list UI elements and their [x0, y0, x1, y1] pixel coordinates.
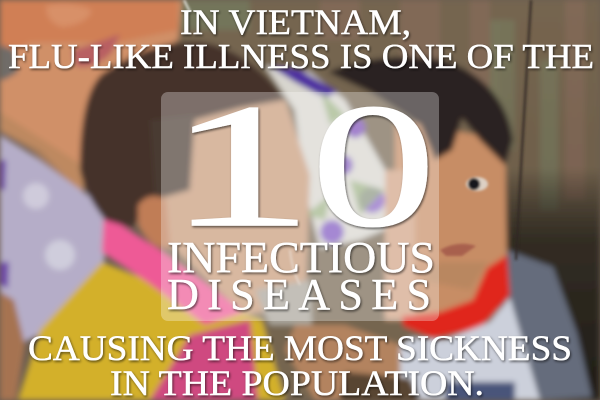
big number 10: 0 [311, 68, 436, 264]
big number 10: 1 [167, 68, 314, 264]
heading: top lines: IN VIETNAM, [180, 2, 411, 42]
heading: bottom lines [28, 328, 572, 400]
mother skin [0, 0, 182, 195]
baby face [135, 100, 310, 315]
shirt print [445, 382, 515, 400]
wood wall [150, 0, 600, 400]
label: infectious diseases: INFECTIOUS [167, 233, 435, 282]
heading: top lines: FLU-LIKE ILLNESS IS ONE OF THE [8, 37, 594, 76]
heading: top lines [8, 2, 594, 76]
label: infectious diseases: DISEASES [167, 270, 431, 319]
patterned hood [265, 66, 395, 248]
baby hair [80, 42, 285, 228]
boy neck [420, 262, 488, 290]
boy shirt white [345, 297, 540, 400]
boy eye [440, 177, 488, 256]
pink collar [102, 214, 245, 325]
big number 10 [167, 68, 436, 264]
mother blouse [0, 135, 105, 345]
mother lips [72, 34, 120, 67]
boy hair [328, 57, 513, 165]
red collar [402, 255, 510, 338]
boy face [395, 120, 507, 322]
boy sleeve grey [507, 250, 592, 400]
baby hand [285, 325, 400, 400]
pink scarf [150, 320, 258, 400]
mother arm [0, 292, 25, 400]
heading: bottom lines: CAUSING THE MOST SICKNESS [28, 328, 572, 368]
label: infectious diseases [167, 233, 435, 319]
translucent panel [161, 92, 439, 321]
mother nose [46, 4, 92, 27]
baby jacket yellow [18, 262, 285, 400]
baby ear [138, 196, 170, 248]
